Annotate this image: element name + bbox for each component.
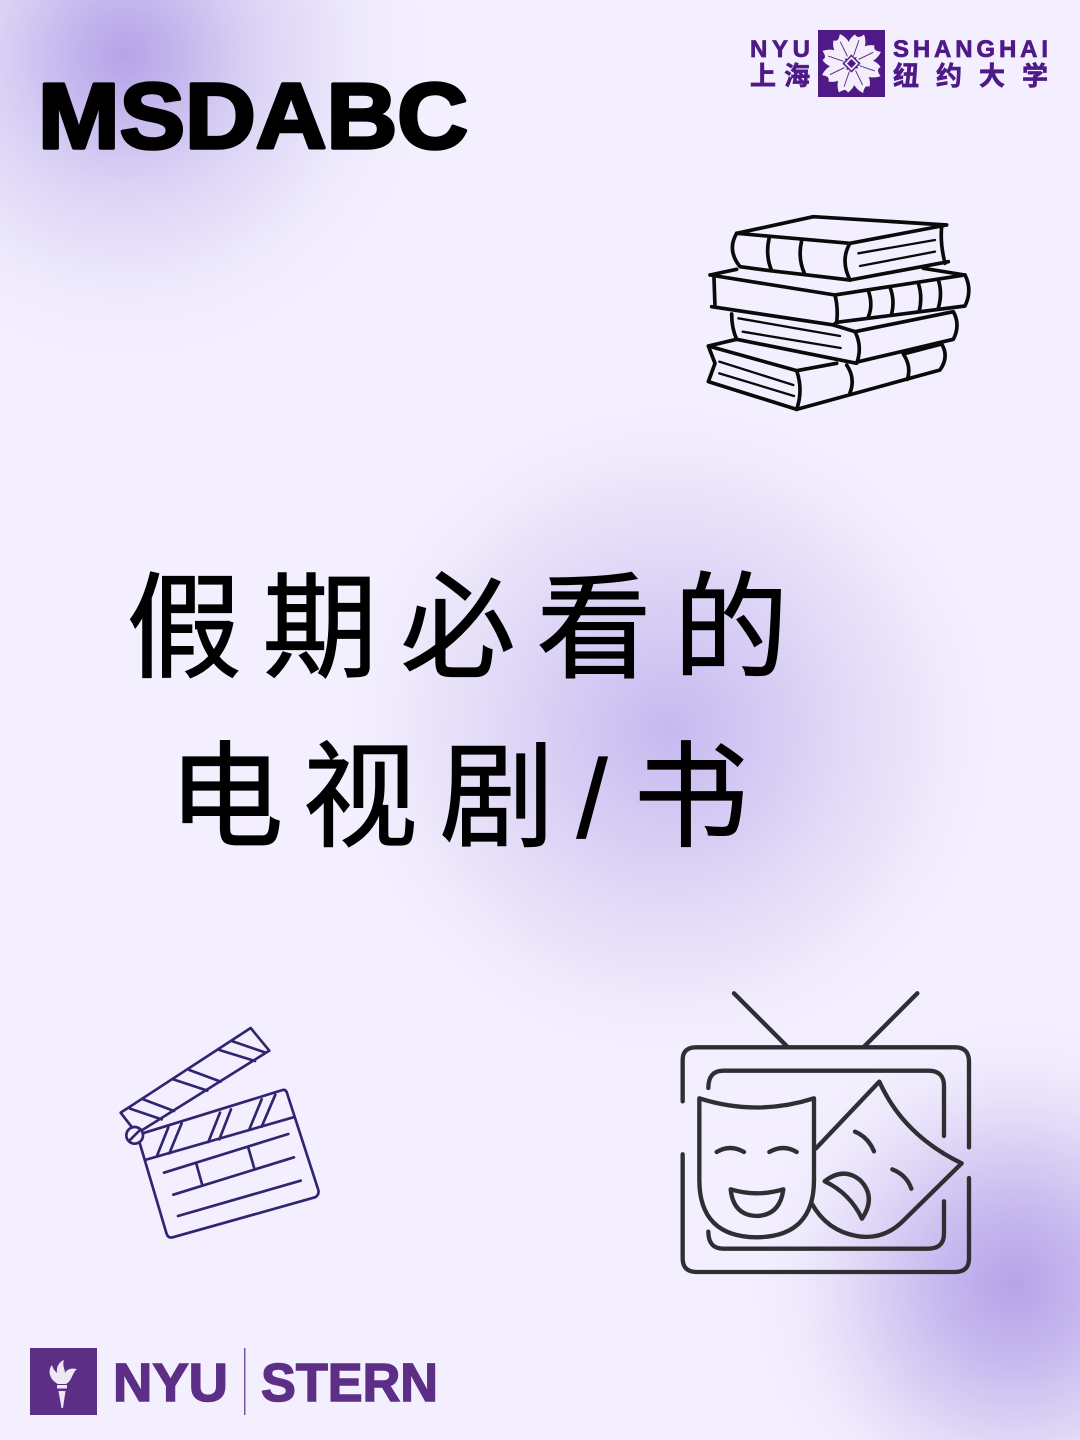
title line 1: 假 xyxy=(126,536,242,702)
second book xyxy=(710,269,969,322)
title line 2: / xyxy=(577,738,608,861)
title line 1: 期 xyxy=(262,536,378,702)
board lines xyxy=(164,1134,301,1216)
background glow: bottom right xyxy=(735,1005,1080,1440)
TV outer frame xyxy=(683,1047,969,1272)
logo wordmark left: 上海 xyxy=(750,56,810,93)
icon: clapperboard xyxy=(121,1028,319,1238)
antennae xyxy=(734,993,917,1047)
title line 2: 剧 xyxy=(439,705,555,871)
logo torch square xyxy=(30,1348,97,1415)
happy mask xyxy=(699,1098,814,1237)
logo wordmark left: NYU xyxy=(750,36,810,63)
bottom book xyxy=(708,339,837,409)
board xyxy=(140,1090,319,1238)
title line 1 xyxy=(126,536,789,702)
logo emblem square xyxy=(818,30,885,97)
title line 2: 视 xyxy=(302,705,418,871)
third book xyxy=(732,312,957,363)
title line 2 xyxy=(168,705,749,871)
title line 1: 看 xyxy=(536,536,652,702)
title xyxy=(126,536,789,871)
hinge xyxy=(126,1127,143,1144)
clapper arm xyxy=(121,1028,269,1129)
logo: NYU Stern xyxy=(30,1348,438,1415)
logo wordmark STERN: STERN xyxy=(261,1353,438,1413)
icon: TV with theatre masks xyxy=(683,993,969,1272)
heading: MSDABC: MSDABC xyxy=(38,64,468,168)
TV inner frame xyxy=(708,1071,944,1249)
title line 1: 必 xyxy=(400,536,516,702)
sad mask xyxy=(812,1082,962,1237)
background glow: centre xyxy=(330,390,1010,1070)
logo wordmark left xyxy=(750,36,810,93)
icon: stack of books xyxy=(708,217,969,409)
top book xyxy=(737,217,948,280)
logo wordmark NYU: NYU xyxy=(113,1353,228,1413)
logo wordmark right xyxy=(893,36,1048,93)
title line 1: 的 xyxy=(673,536,789,702)
logo divider xyxy=(244,1348,246,1415)
logo wordmark right: SHANGHAI xyxy=(893,36,1048,63)
title line 2: 电 xyxy=(168,705,284,871)
logo: NYU Shanghai xyxy=(750,30,1048,97)
logo wordmark right: 纽约大学 xyxy=(893,56,1048,93)
title line 2: 书 xyxy=(633,705,749,871)
background glow: top left xyxy=(0,0,450,380)
